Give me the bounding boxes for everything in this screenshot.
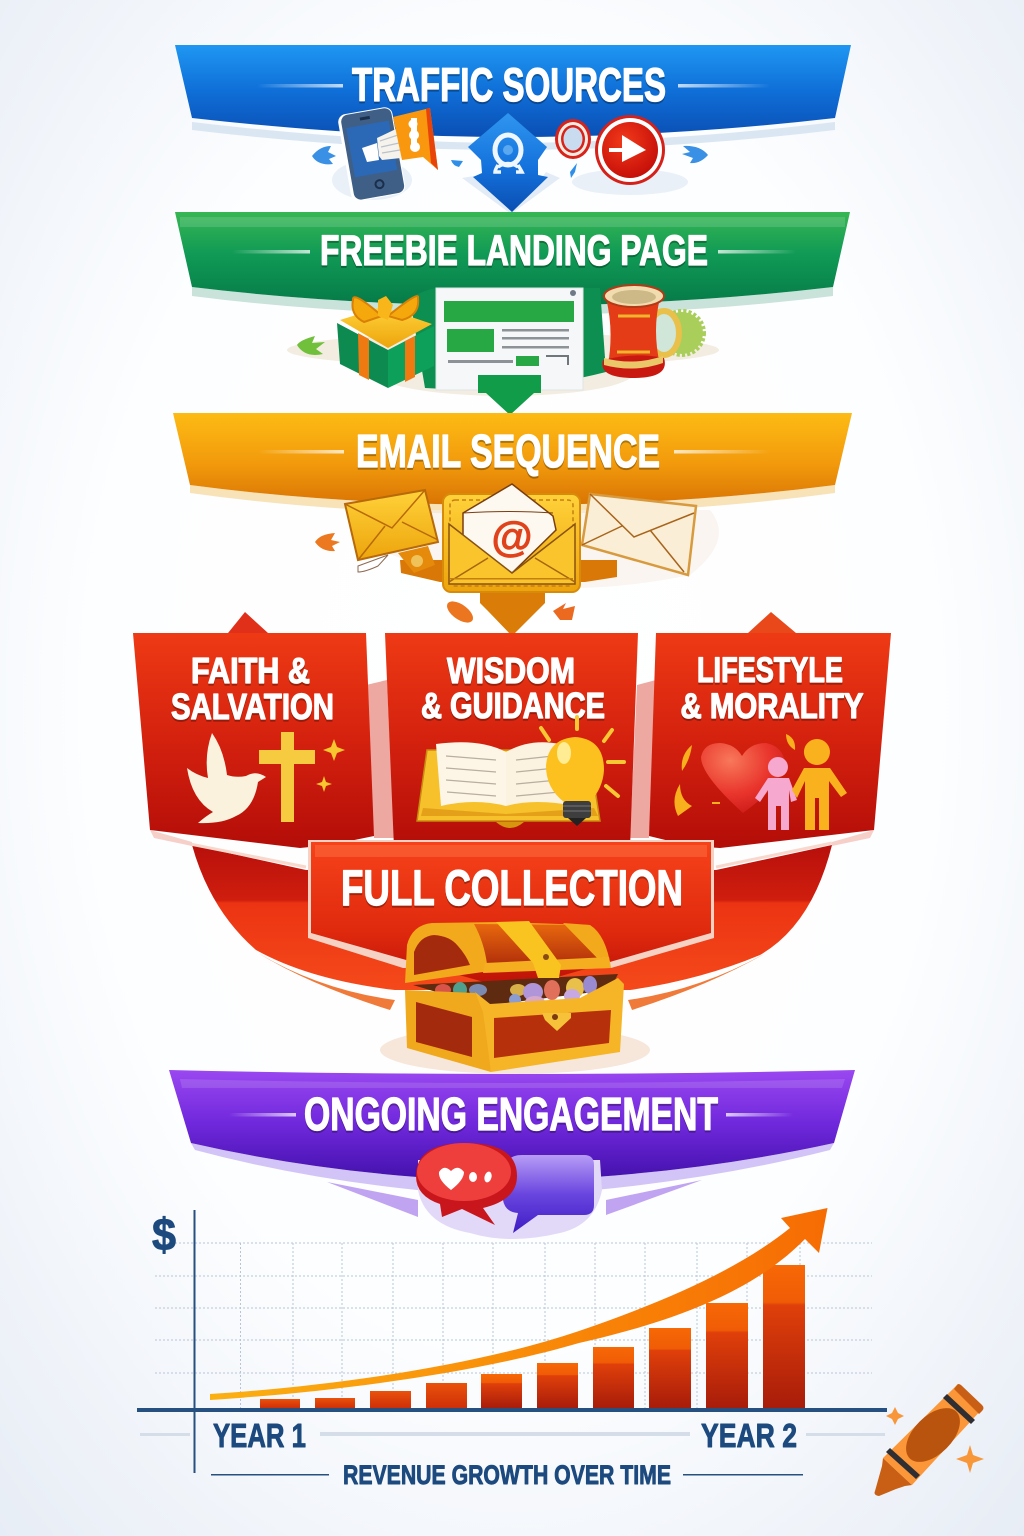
dollar sign: $ xyxy=(152,1209,176,1260)
icon: gear xyxy=(661,312,703,354)
icon: open book xyxy=(417,742,600,828)
icon: blue arrow target xyxy=(462,113,560,214)
icon: red bubble xyxy=(416,1143,517,1225)
icon: treasure chest xyxy=(380,921,650,1074)
icon: left bird xyxy=(312,146,336,164)
icons: freebie landing page xyxy=(287,285,719,415)
icon: play button xyxy=(595,115,665,185)
icon: gift box xyxy=(337,296,434,388)
chart: revenue growth xyxy=(137,1208,887,1490)
icon: leaves xyxy=(443,597,575,627)
x axis xyxy=(137,1408,887,1412)
icon: right envelope xyxy=(582,494,696,575)
arrow: growth curve xyxy=(210,1208,828,1400)
banner: traffic sources xyxy=(175,45,851,150)
icon: right bird xyxy=(682,146,708,163)
icon: adult xyxy=(792,739,847,830)
icon: leaf xyxy=(297,336,325,355)
heading: wisdom and guidance: WISDOM xyxy=(447,650,575,691)
y axis xyxy=(194,1210,196,1473)
banner: ongoing engagement xyxy=(169,1070,855,1217)
icon: web page xyxy=(436,288,583,390)
icons: email sequence xyxy=(315,484,719,636)
heading: full collection: FULL COLLECTION xyxy=(341,860,683,916)
heading: faith and salvation: FAITH & xyxy=(191,650,310,691)
panel: lifestyle and morality xyxy=(649,612,891,848)
bars xyxy=(260,1265,805,1408)
heading: freebie landing page: FREEBIE LANDING PAGE xyxy=(320,227,708,275)
icon: light bulb xyxy=(541,717,624,826)
pale strips between panels xyxy=(366,680,656,838)
grid xyxy=(155,1243,872,1408)
collection bowl xyxy=(190,843,832,1010)
panel: wisdom and guidance: & GUIDANCE xyxy=(421,685,605,726)
panel: full collection xyxy=(308,840,714,990)
icon: left envelope xyxy=(345,490,438,573)
banner: email sequence xyxy=(173,413,852,514)
icon: purple bubble xyxy=(503,1155,594,1233)
arrow: green pointer xyxy=(478,375,541,415)
icon: small ring xyxy=(555,119,591,159)
icon: gold petals xyxy=(674,734,795,816)
heading: traffic sources: TRAFFIC SOURCES xyxy=(352,58,666,111)
icon: orange leaf xyxy=(315,533,340,551)
chest lid xyxy=(405,921,611,983)
icon: crayon xyxy=(874,1384,984,1496)
icon: orange flag xyxy=(393,108,438,170)
chest interior xyxy=(413,974,618,1006)
banner: freebie landing page xyxy=(175,212,850,315)
panel: lifestyle and morality: & MORALITY xyxy=(680,687,864,726)
panel: faith and salvation xyxy=(133,612,374,848)
panel: faith and salvation: SALVATION xyxy=(171,686,334,727)
icons: traffic sources xyxy=(312,106,708,214)
icon: centre envelope: @ xyxy=(492,513,532,560)
pale bands xyxy=(140,1432,885,1436)
chest base xyxy=(405,978,624,1072)
icon: child xyxy=(755,757,797,830)
icon: sparkles xyxy=(316,739,345,792)
label: year 2: YEAR 2 xyxy=(701,1417,797,1454)
heading: ongoing engagement: ONGOING ENGAGEMENT xyxy=(304,1088,718,1140)
icon: small blue marks xyxy=(451,160,577,178)
icon: cross xyxy=(259,732,315,822)
caption: revenue growth: REVENUE GROWTH OVER TIME xyxy=(343,1460,671,1490)
icon: chat bubbles xyxy=(416,1143,602,1239)
icon: centre envelope xyxy=(443,484,580,592)
heading: lifestyle and morality: LIFESTYLE xyxy=(697,651,843,690)
label: year 1: YEAR 1 xyxy=(213,1417,306,1454)
icon: mug xyxy=(602,285,679,378)
icon: thumb xyxy=(362,128,401,162)
panel: wisdom and guidance xyxy=(385,633,638,848)
gems xyxy=(435,976,597,1008)
heading: email sequence: EMAIL SEQUENCE xyxy=(356,425,660,477)
icon: crayon sparkles xyxy=(886,1407,984,1473)
icon: dove xyxy=(187,733,266,823)
icon: phone xyxy=(337,106,406,202)
icon: heart xyxy=(701,743,785,813)
arrow: orange pointer xyxy=(480,590,545,636)
